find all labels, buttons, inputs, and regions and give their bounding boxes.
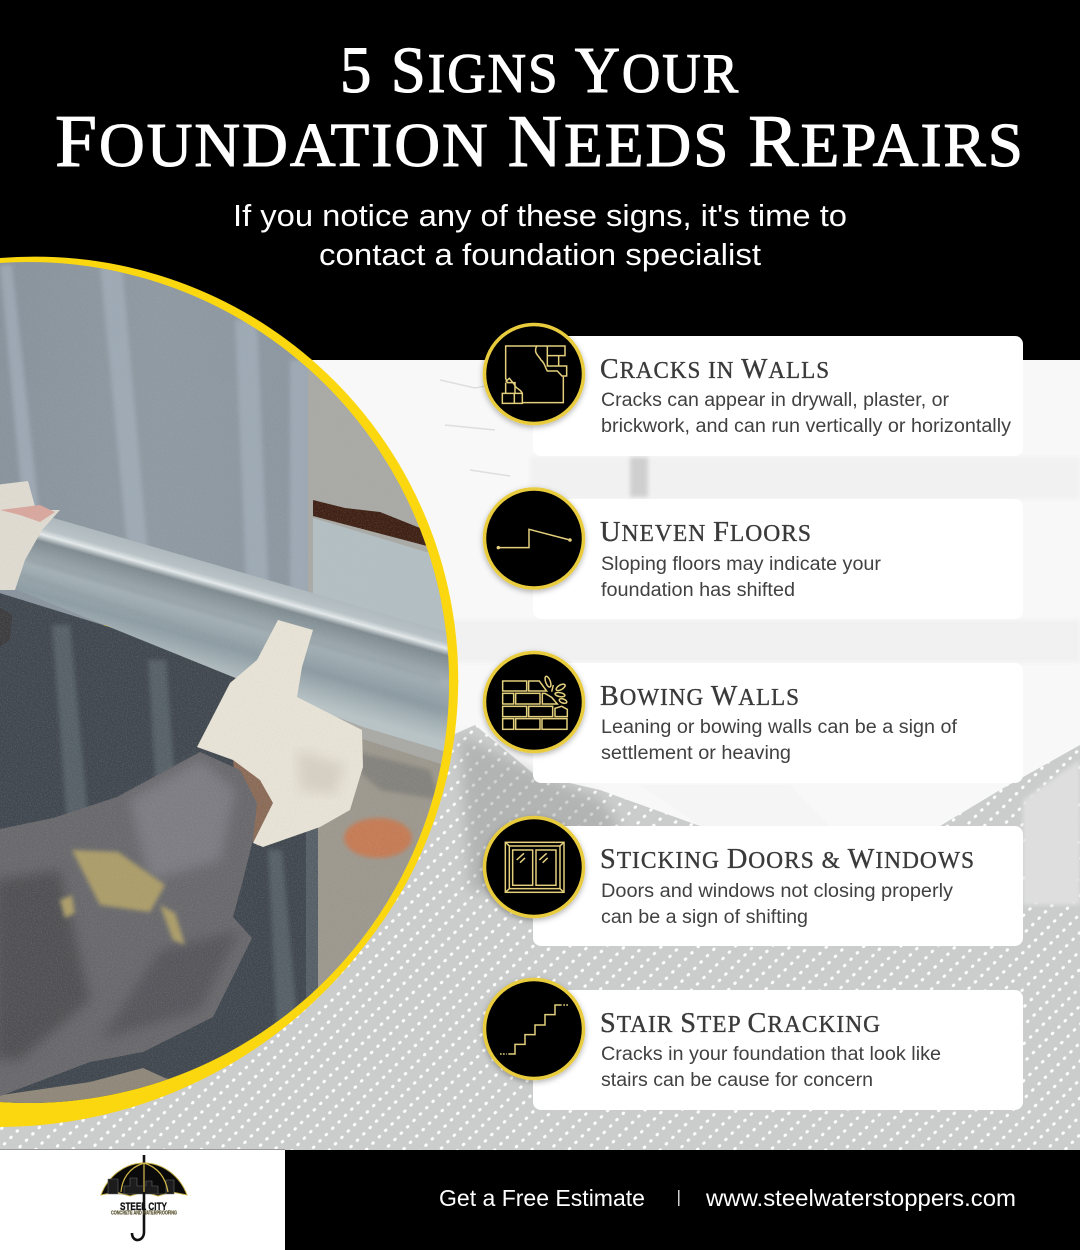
description line 2: brickwork, and can run vertically or horizontally xyxy=(601,416,1012,437)
call to action: Get a Free Estimate xyxy=(439,1185,645,1211)
city skyline xyxy=(108,1178,174,1194)
card xyxy=(533,499,1023,619)
title xyxy=(55,34,1025,183)
heading: STICKING DOORS & WINDOWS xyxy=(600,843,975,875)
card xyxy=(533,336,1023,456)
footer call to action bar xyxy=(285,1150,1080,1250)
title: 5 SIGNS YOUR xyxy=(340,34,740,107)
divider glyph xyxy=(678,1190,680,1206)
photo: upper corrugated wall xyxy=(0,255,320,625)
logo: steel city umbrella xyxy=(101,1155,187,1240)
background: dotted metal membrane xyxy=(0,725,1080,1150)
card xyxy=(533,990,1023,1110)
logo name: STEEL CITY xyxy=(120,1201,167,1213)
description: Sloping floors may indicate your xyxy=(601,554,882,575)
photo: rear metal track xyxy=(313,518,447,638)
logo tagline: CONCRETE AND WATERPROOFING xyxy=(111,1210,177,1216)
item 1: cracks in walls xyxy=(484,324,1023,456)
description line 2: can be a sign of shifting xyxy=(601,907,808,928)
icon: cracked wall xyxy=(484,324,584,424)
umbrella canopy xyxy=(101,1163,187,1196)
photo: grain texture xyxy=(0,255,460,1115)
photo: forearm skin xyxy=(233,760,275,846)
footer logo panel xyxy=(0,1149,285,1250)
icon: sloped floor xyxy=(484,489,584,588)
photo: white glove xyxy=(197,620,363,847)
heading: UNEVEN FLOORS xyxy=(600,516,812,548)
header black band xyxy=(0,0,1080,360)
item 2: uneven floors xyxy=(484,489,1023,619)
item 5: stair step cracking xyxy=(484,980,1023,1110)
photo: dark sleeve cuff at left xyxy=(0,608,12,646)
icon: brick wall with plant xyxy=(484,652,584,752)
title: FOUNDATION NEEDS REPAIRS xyxy=(55,101,1025,183)
photo: rust crack xyxy=(313,500,426,546)
photo: lower dark wall xyxy=(0,590,318,1110)
photo: lower concrete and brick xyxy=(318,739,441,988)
description line 2: foundation has shifted xyxy=(601,580,795,601)
umbrella ribs and handle xyxy=(132,1155,144,1240)
yellow ring around photo xyxy=(0,207,458,1127)
icon: window xyxy=(484,818,584,916)
card xyxy=(533,826,1023,946)
description: Cracks in your foundation that look like xyxy=(601,1044,941,1065)
description line 2: stairs can be cause for concern xyxy=(601,1070,873,1091)
subtitle: If you notice any of these signs, it's time to xyxy=(233,198,847,233)
description: Leaning or bowing walls can be a sign of xyxy=(601,717,958,738)
photo: steel bar xyxy=(13,517,460,758)
heading: STAIR STEP CRACKING xyxy=(600,1007,881,1039)
photo: worker installing metal track xyxy=(0,255,460,1115)
description line 2: settlement or heaving xyxy=(601,743,791,764)
subtitle: contact a foundation specialist xyxy=(319,237,761,272)
photo: floor xyxy=(0,1068,168,1103)
website: www.steelwaterstoppers.com xyxy=(705,1185,1016,1211)
photo: left hand xyxy=(0,481,60,590)
photo: concrete wall xyxy=(308,368,449,996)
item 4: sticking doors and windows xyxy=(484,818,1023,946)
photo: sleeve xyxy=(0,752,257,1098)
icon: stair step crack xyxy=(484,980,584,1078)
item 3: bowing walls xyxy=(484,652,1023,783)
description: Doors and windows not closing properly xyxy=(601,881,954,902)
heading: CRACKS IN WALLS xyxy=(600,353,830,385)
card xyxy=(533,663,1023,783)
description: Cracks can appear in drywall, plaster, or xyxy=(601,390,950,411)
background: brick wall texture xyxy=(0,360,1080,1150)
heading: BOWING WALLS xyxy=(600,680,800,712)
subtitle xyxy=(233,198,847,272)
